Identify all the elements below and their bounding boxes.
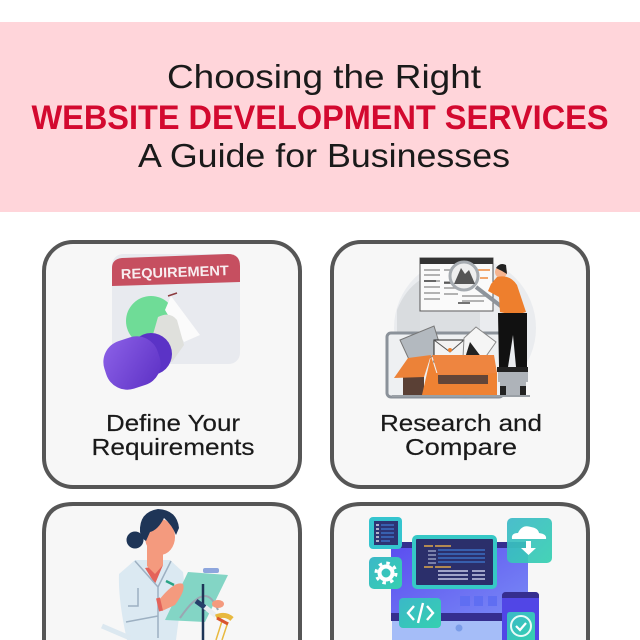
code tag tile	[399, 598, 441, 628]
magnifying glass	[450, 262, 502, 307]
person	[488, 264, 528, 395]
card label: Define Your	[106, 410, 240, 436]
envelopes	[400, 326, 496, 366]
card label: Compare	[405, 434, 517, 460]
web page window	[420, 258, 493, 311]
code tag glyph	[408, 603, 433, 623]
card label: Requirements	[92, 434, 254, 460]
panel: research and compare	[332, 242, 588, 487]
panel: bottom left card	[44, 504, 300, 640]
phone with check	[502, 592, 539, 640]
gear tile	[369, 557, 402, 589]
title line 3: A Guide for Businesses	[138, 137, 510, 174]
icon: woman with clipboard	[102, 509, 232, 640]
list tile	[369, 517, 402, 549]
panel: define your requirements	[44, 242, 300, 487]
clipboard	[165, 572, 228, 622]
panel: bottom right card	[332, 504, 588, 640]
icon: research illustration	[387, 257, 536, 399]
hair	[140, 509, 179, 541]
title line 1: Choosing the Right	[167, 58, 481, 95]
icon: requirement calendar	[98, 254, 240, 395]
open box	[392, 355, 530, 396]
cloud download tile	[507, 518, 552, 563]
header banner	[0, 22, 640, 212]
code window	[414, 537, 495, 587]
calendar label: REQUIREMENT	[121, 262, 230, 282]
icon: developer monitor	[369, 517, 552, 640]
title line 2: WEBSITE DEVELOPMENT SERVICES	[32, 99, 608, 137]
card label: Research and	[380, 410, 542, 436]
